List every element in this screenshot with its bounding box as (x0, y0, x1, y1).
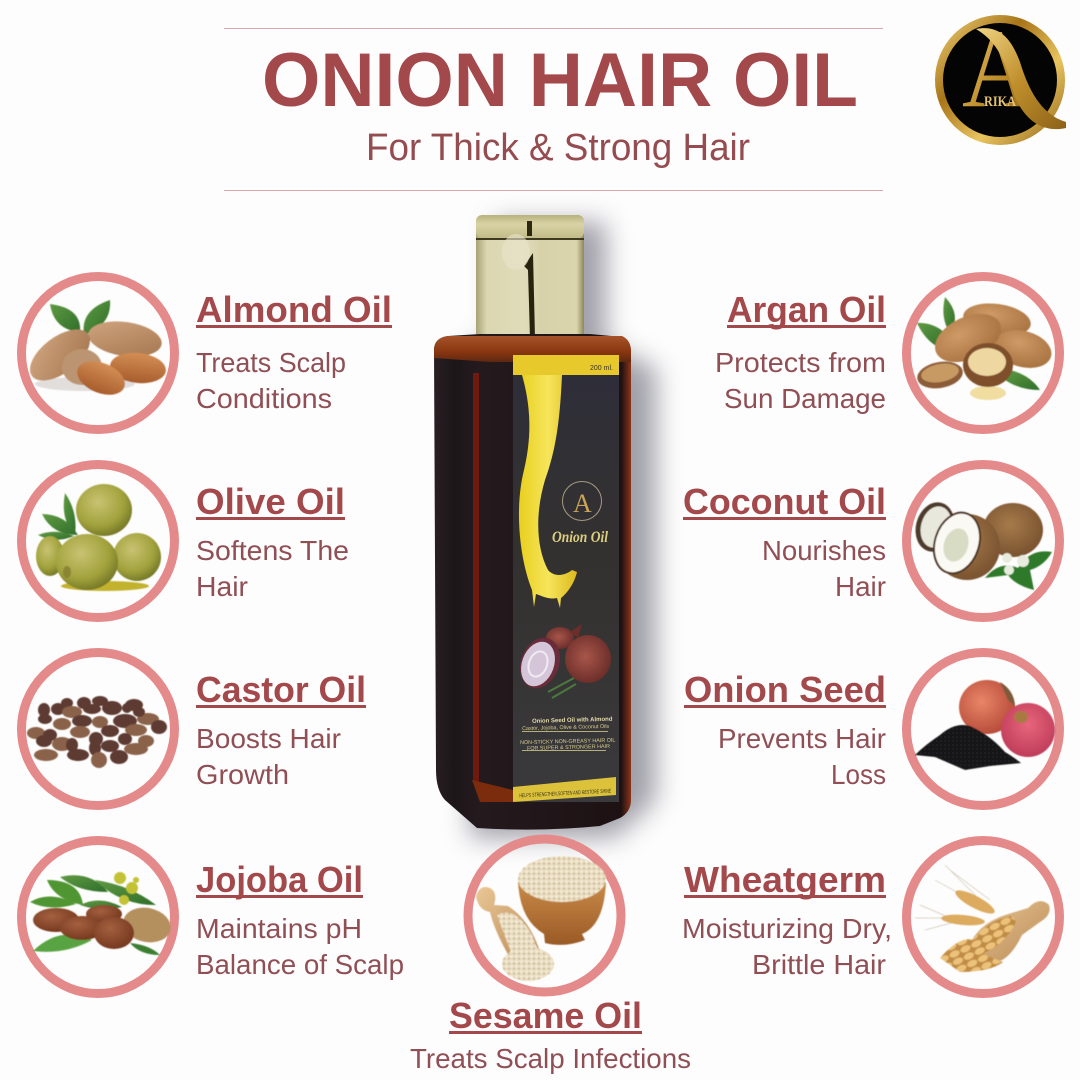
description: Protects from (715, 347, 886, 378)
label bottom strip (513, 777, 616, 802)
description (196, 723, 341, 790)
volume: 200 ml. (590, 365, 613, 372)
ring (468, 839, 621, 992)
ingredient: Almond Oil (21, 276, 392, 430)
onions (513, 624, 611, 698)
description: Softens The (196, 535, 349, 566)
ring (906, 840, 1060, 994)
heading: Olive Oil (196, 481, 345, 522)
label copy (520, 717, 615, 752)
heading: Jojoba Oil (196, 859, 363, 900)
amber shoulder (434, 336, 631, 362)
product bottle (434, 215, 631, 830)
header rule bottom (224, 190, 883, 191)
heading: Onion Seed (684, 669, 886, 710)
subtitle: For Thick & Strong Hair (366, 127, 750, 169)
label copy: Onion Seed Oil with Almond (532, 717, 613, 725)
description (196, 535, 349, 602)
label copy: Castor, Jojoba, Olive & Coconut Oils (522, 724, 610, 732)
description: Moisturizing Dry, (682, 913, 892, 944)
ingredient: Argan Oil (715, 276, 1060, 430)
icon: wheat and scoop (915, 865, 1050, 972)
label top strip (513, 355, 619, 375)
label copy: NON-STICKY NON-GREASY HAIR OIL (520, 738, 615, 746)
header rule top (224, 28, 883, 29)
description: Nourishes (762, 535, 886, 566)
description: Prevents Hair (718, 723, 886, 754)
ingredient: Sesame Oil (410, 839, 691, 1074)
description: Treats Scalp Infections (410, 1043, 691, 1074)
label panel (513, 355, 619, 802)
heading: Castor Oil (196, 669, 366, 710)
label strip text: HELPS STRENGTHEN,SOFTEN AND RESTORE SHINE (519, 789, 611, 799)
heading: Almond Oil (196, 289, 392, 330)
label logo: A (573, 489, 592, 518)
description: Hair (835, 571, 886, 602)
bottle cap (476, 215, 584, 340)
icon: olives (36, 484, 161, 591)
hair oil stream (519, 375, 577, 608)
description: Sun Damage (724, 383, 886, 414)
red inner stripe (473, 373, 479, 783)
description (682, 913, 892, 980)
icon: coconut (910, 498, 1052, 590)
description: Loss (831, 759, 886, 790)
description: Growth (196, 759, 289, 790)
heading: Argan Oil (727, 289, 886, 330)
brand logo: RIKA (984, 94, 1016, 110)
icon: castor beans (27, 696, 167, 768)
description (762, 535, 886, 602)
description: Hair (196, 571, 248, 602)
brand logo (935, 7, 1066, 145)
heading: Coconut Oil (683, 481, 886, 522)
icon: argan (915, 297, 1056, 400)
heading: Sesame Oil (449, 995, 642, 1036)
description: Maintains pH (196, 913, 362, 944)
ingredient: Olive Oil (22, 464, 349, 618)
description (196, 347, 346, 414)
icon: jojoba (30, 872, 174, 955)
ring (22, 652, 174, 806)
description (196, 913, 404, 980)
ingredient: Coconut Oil (683, 464, 1060, 618)
title: ONION HAIR OIL (262, 38, 858, 123)
ring (22, 840, 174, 994)
ring (906, 276, 1060, 430)
ring (906, 652, 1060, 806)
icon: onion and seeds (915, 680, 1055, 770)
description: Boosts Hair (196, 723, 341, 754)
icon: almonds (21, 300, 167, 401)
brand logo: A (962, 7, 1034, 131)
ingredient: Jojoba Oil (22, 840, 404, 994)
ring (22, 464, 174, 618)
product name: Onion Oil (552, 529, 608, 546)
description: Balance of Scalp (196, 949, 404, 980)
ring (906, 464, 1060, 618)
description: Conditions (196, 383, 332, 414)
ingredient: Wheatgerm (682, 840, 1060, 994)
description (715, 347, 886, 414)
ring (22, 276, 174, 430)
label copy: FOR SUPER & STRONGER HAIR (527, 744, 610, 752)
label logo (562, 482, 602, 520)
heading: Wheatgerm (684, 859, 886, 900)
description (718, 723, 886, 790)
icon: sesame bowl and scoop (476, 856, 606, 981)
bottle shadow (470, 222, 656, 838)
bottle body (434, 334, 631, 830)
ingredient: Onion Seed (684, 652, 1060, 806)
description: Brittle Hair (752, 949, 886, 980)
description: Treats Scalp (196, 347, 346, 378)
ingredient: Castor Oil (22, 652, 366, 806)
amber base (472, 780, 513, 802)
